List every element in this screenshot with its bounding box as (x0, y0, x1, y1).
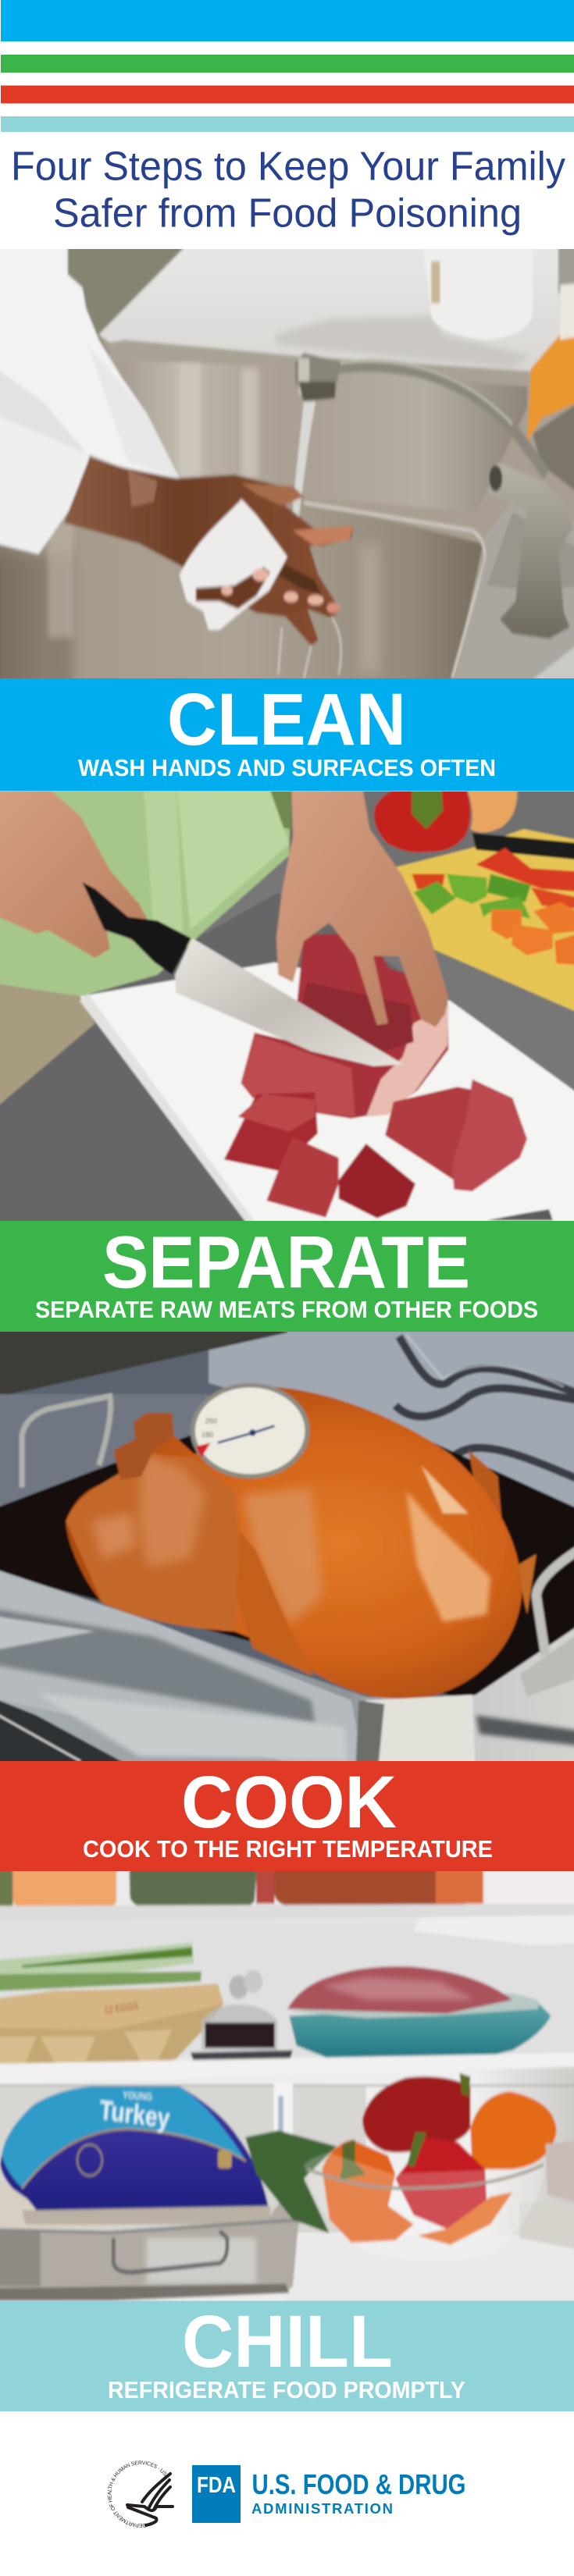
shirt sleeve (0, 230, 180, 554)
band: clean: CLEAN (167, 678, 406, 761)
roasting pan (0, 2169, 308, 2300)
appliance thermometer (273, 2083, 294, 2136)
title (11, 144, 565, 236)
turkey (66, 1387, 522, 1700)
band: cook: COOK (181, 1761, 397, 1844)
band: chill: CHILL (182, 2300, 393, 2383)
logo: FDA: ADMINISTRATION (251, 2500, 393, 2517)
icon: faucet (294, 353, 573, 639)
white cutting board (80, 962, 574, 1236)
roasting pan (0, 1543, 574, 1779)
middle shelf (0, 2052, 574, 2084)
band: separate: SEPARATE (102, 1221, 470, 1304)
wrapped turkey: YOUNG (123, 2090, 152, 2103)
photo: roast turkey in a pan (0, 1323, 574, 1783)
oven rack grooves (395, 1336, 574, 1484)
band: clean (0, 678, 574, 792)
peppers in glass bowl (304, 2073, 556, 2260)
green onions (0, 1943, 201, 1991)
glass butter dish (191, 1970, 293, 2071)
photo: refrigerator shelves (0, 1853, 574, 2316)
band: chill: REFRIGERATE FOOD PROMPTLY (108, 2376, 465, 2403)
egg carton (0, 1984, 224, 2074)
title: Four Steps to Keep Your Family (11, 144, 565, 189)
hands with soap foam (64, 457, 353, 646)
logo: FDA (192, 2465, 465, 2523)
icon: dial thermometer: 250 (205, 1417, 217, 1425)
band: cook (0, 1761, 574, 1872)
title: Safer from Food Poisoning (53, 190, 522, 236)
raw meat pieces (224, 934, 527, 1219)
yellow cutting board with vegetables (374, 785, 574, 1018)
band: clean: WASH HANDS AND SURFACES OFTEN (78, 754, 496, 781)
icon: dial thermometer: 180 (201, 1431, 213, 1439)
top shelf containers (0, 1871, 574, 1944)
logo: FDA: U.S. FOOD & DRUG (251, 2468, 465, 2500)
band: separate (0, 1221, 574, 1332)
wrapped turkey (0, 2087, 269, 2222)
shirt and trousers (0, 777, 291, 1116)
photo: cutting raw meat on a white board (0, 777, 574, 1240)
icon: dial thermometer (191, 1383, 310, 1478)
band: separate: SEPARATE RAW MEATS FROM OTHER FOODS (35, 1296, 538, 1323)
egg carton: 12 EGGS (104, 2001, 139, 2016)
plate of ground meat (287, 1966, 551, 2062)
logo: HHS seal: DEPARTMENT OF HEALTH & HUMAN SERVICES · USA (108, 2460, 167, 2528)
band: chill (0, 2300, 574, 2411)
band: cook: COOK TO THE RIGHT TEMPERATURE (83, 1835, 493, 1863)
hands and knife (0, 777, 448, 1066)
logo: FDA: FDA (197, 2473, 236, 2498)
wrapped turkey: Turkey (98, 2094, 171, 2134)
photo: washing hands at a sink (0, 230, 574, 696)
top colour stripes (1, 0, 574, 132)
